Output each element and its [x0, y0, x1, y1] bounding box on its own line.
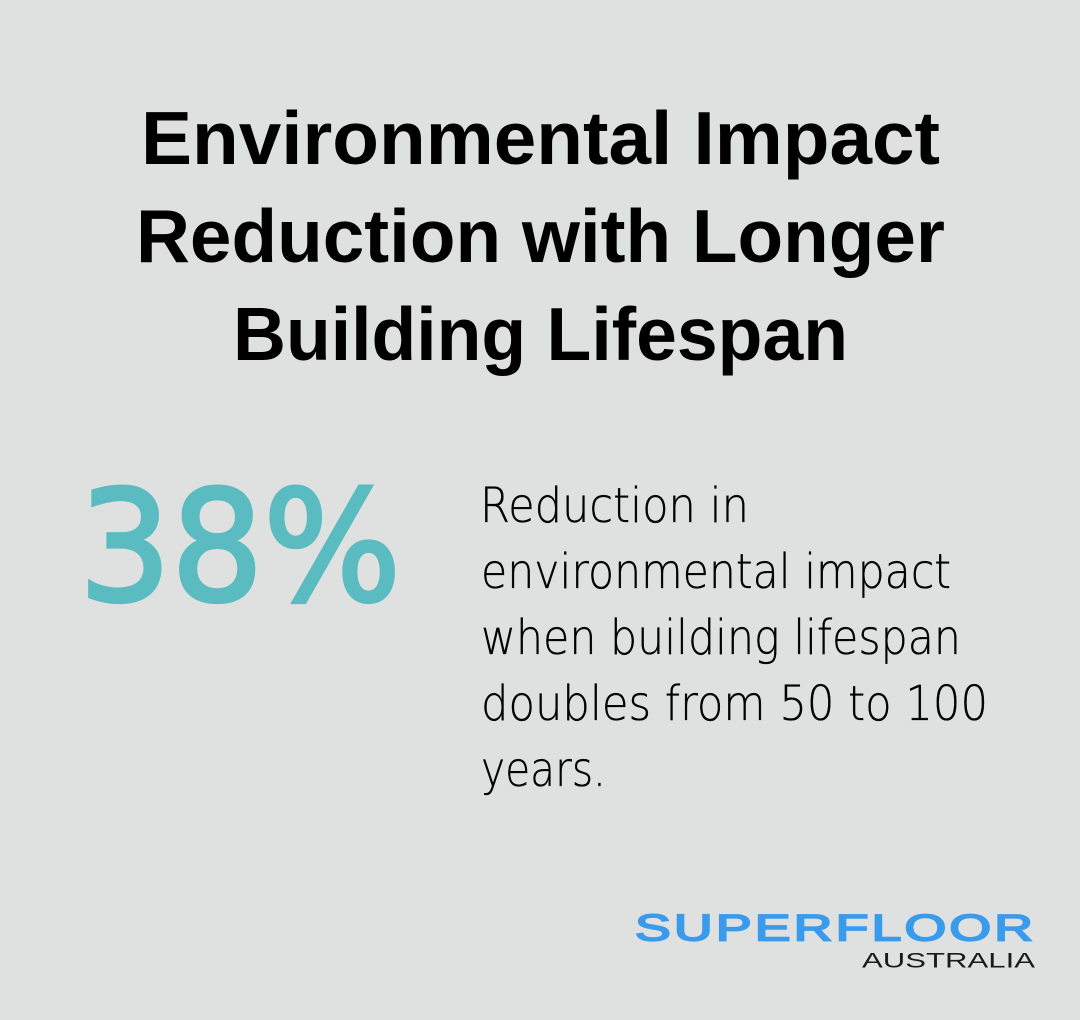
logo: Superfloor Australia: AUSTRALIA — [862, 948, 1036, 972]
description text: Reduction in — [480, 478, 749, 534]
title: Environmental Impact — [141, 96, 940, 180]
title — [136, 96, 945, 376]
description text — [480, 478, 988, 798]
description text: years. — [481, 742, 606, 798]
description text: doubles from 50 to 100 — [481, 676, 988, 732]
logo: Superfloor Australia — [635, 907, 1036, 972]
title: Reduction with Longer — [136, 194, 945, 278]
description text: environmental impact — [481, 544, 951, 600]
title: Building Lifespan — [233, 292, 848, 376]
big statistic: 38%: 38% — [79, 459, 401, 637]
logo: Superfloor Australia: SUPERFLOOR — [635, 907, 1033, 948]
description text: when building lifespan — [481, 610, 961, 666]
